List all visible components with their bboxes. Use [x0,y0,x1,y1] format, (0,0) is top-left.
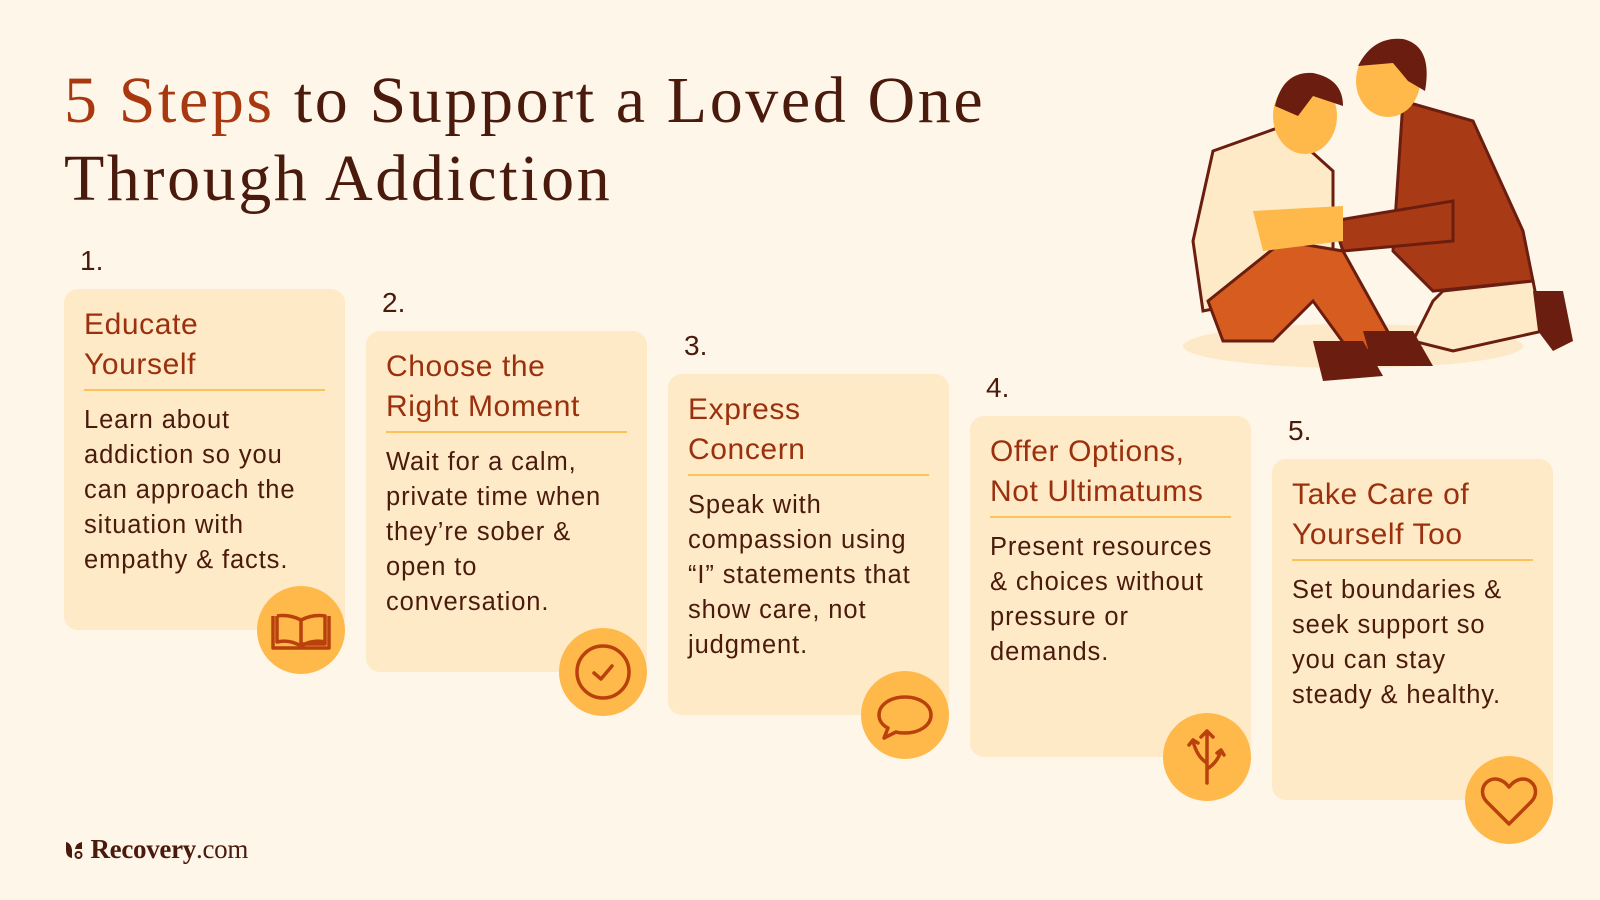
card: express concern: Express [688,393,801,426]
title: Through Addiction [64,142,612,215]
card: take care of yourself: Take Care of [1292,478,1469,511]
card: choose the right moment: Right Moment [386,390,580,423]
step 4 [970,372,1251,801]
card: educate yourself: empathy & facts. [84,546,288,574]
step 5 [1272,415,1553,844]
title: 5 Steps to Support a Loved One [64,64,985,137]
card: express concern: compassion using [688,526,907,554]
card: take care of yourself [1272,459,1553,800]
card: educate yourself: Educate [84,308,198,341]
card: offer options: Present resources [990,533,1212,561]
card: choose the right moment: Wait for a calm, [386,448,577,476]
card: choose the right moment: they’re sober & [386,518,571,546]
title [64,64,985,215]
card: offer options: Offer Options, [990,435,1185,468]
illustration: two men [1183,38,1573,381]
card: take care of yourself: steady & healthy. [1292,681,1501,709]
card: express concern [668,374,949,715]
text: 1. [80,245,103,276]
card: offer options: & choices without [990,568,1204,596]
icon: heart [1465,756,1553,844]
card: choose the right moment: Choose the [386,350,545,383]
card: educate yourself: Learn about [84,406,230,434]
card: choose the right moment: conversation. [386,588,549,616]
card: offer options: Not Ultimatums [990,475,1203,508]
card: take care of yourself: seek support so [1292,611,1486,639]
logo: Recovery.com [90,834,248,864]
card: express concern: Speak with [688,491,822,519]
card: offer options: pressure or [990,603,1129,631]
icon: branching arrows [1163,713,1251,801]
card: take care of yourself: Set boundaries & [1292,576,1502,604]
icon: check circle [559,628,647,716]
card: choose the right moment: open to [386,553,477,581]
step 1 [64,245,345,674]
card: educate yourself: situation with [84,511,244,539]
icon: book [257,586,345,674]
text: 4. [986,372,1009,403]
card: choose the right moment [366,331,647,672]
card: express concern: “I” statements that [688,561,911,589]
card: choose the right moment: private time when [386,483,601,511]
card: express concern: judgment. [688,631,808,659]
card: express concern: show care, not [688,596,866,624]
text: 2. [382,287,405,318]
card: educate yourself: can approach the [84,476,295,504]
card: take care of yourself: Yourself Too [1292,518,1463,551]
step 3 [668,330,949,759]
icon: speech bubble [861,671,949,759]
card: offer options [970,416,1251,757]
card: educate yourself: addiction so you [84,441,283,469]
card: offer options: demands. [990,638,1109,666]
card: educate yourself [64,289,345,630]
step 2 [366,287,647,716]
card: express concern: Concern [688,433,806,466]
text: 5. [1288,415,1311,446]
text: 3. [684,330,707,361]
card: take care of yourself: you can stay [1292,646,1446,674]
card: educate yourself: Yourself [84,348,196,381]
